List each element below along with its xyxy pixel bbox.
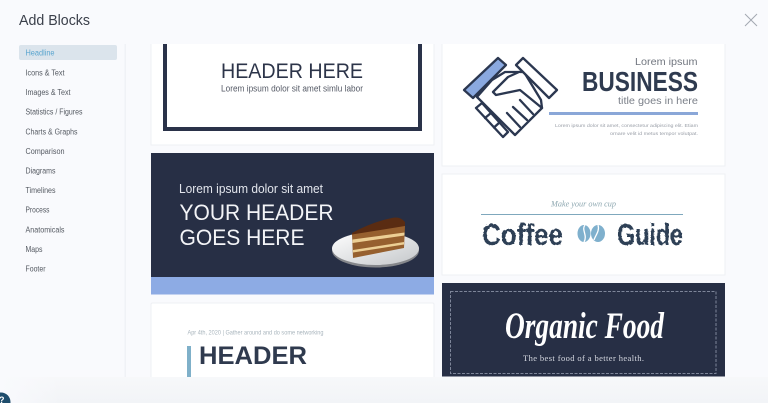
- category list: Timelines: [26, 186, 56, 195]
- accent band: [151, 277, 434, 294]
- heading: HEADER: [199, 342, 307, 370]
- category list: Maps: [26, 245, 42, 254]
- panel: category sidebar: [19, 45, 117, 274]
- subtitle: title goes in here: [618, 96, 698, 107]
- body text: ornare velit id metus tempor volutpat.: [610, 131, 698, 137]
- main heading: BUSINESS: [582, 66, 698, 97]
- card: header here: [151, 44, 434, 145]
- body text: [555, 123, 698, 137]
- tagline: The best food of a better health.: [523, 353, 644, 363]
- category list: Process: [26, 206, 50, 214]
- heading: [482, 217, 683, 252]
- category list: Footer: [26, 264, 46, 274]
- card: organic food: [442, 283, 725, 376]
- active category: headline: Headline: [26, 48, 55, 58]
- category list: Statistics / Figures: [26, 108, 82, 116]
- category list: Comparison: [26, 147, 64, 156]
- subheading: Lorem ipsum dolor sit amet simlu labor: [221, 84, 363, 94]
- category list: Anatomicals: [26, 226, 64, 234]
- heading: Guide: [617, 217, 683, 252]
- card: your header with cake: [151, 153, 434, 294]
- icon: cake on plate: [332, 218, 419, 268]
- headline: [180, 200, 334, 250]
- divider: [549, 112, 698, 115]
- dashed frame: [450, 292, 716, 374]
- icon: coffee beans: [578, 225, 605, 242]
- heading: Coffee: [482, 217, 563, 252]
- small heading: Lorem ipsum: [635, 56, 698, 68]
- help button: [0, 392, 10, 403]
- heading: HEADER HERE: [221, 59, 363, 83]
- card: business: [442, 44, 725, 166]
- frame: [165, 44, 420, 129]
- category list: Images & Text: [26, 88, 71, 97]
- category list: Icons & Text: [26, 68, 65, 78]
- icon: close: [745, 14, 757, 26]
- headline: YOUR HEADER: [180, 200, 334, 225]
- category list: Diagrams: [26, 166, 56, 176]
- bottom fade: [0, 377, 768, 403]
- date line: Apr 4th, 2020 | Gather around and do some networking: [188, 330, 324, 336]
- tagline: Lorem ipsum dolor sit amet: [179, 181, 323, 196]
- icon: handshake: [464, 58, 557, 137]
- title: Add Blocks: [19, 13, 90, 29]
- heading: Organic Food: [505, 306, 664, 347]
- tagline: Make your own cup: [550, 198, 616, 208]
- body text: Lorem ipsum dolor sit amet, consectetur adipiscing elit. Etiam: [555, 123, 698, 129]
- category list: [26, 68, 82, 274]
- card: dated header: [151, 303, 434, 383]
- active category: headline: [19, 45, 117, 60]
- card: coffee guide: [442, 174, 725, 275]
- accent bar: [187, 346, 191, 377]
- category list: Charts & Graphs: [26, 128, 78, 136]
- headline: GOES HERE: [180, 225, 304, 250]
